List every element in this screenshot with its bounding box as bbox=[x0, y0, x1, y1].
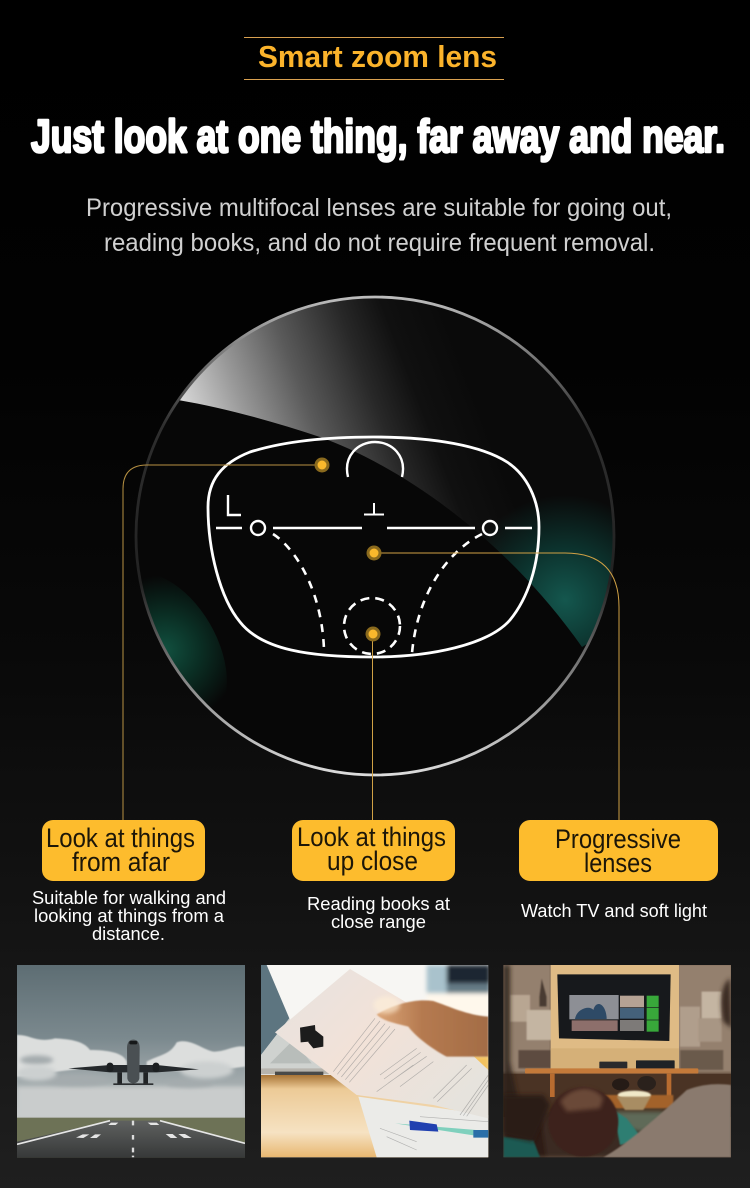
leader line: progressive bbox=[374, 553, 619, 820]
lens diagram bbox=[134, 296, 616, 776]
photo: airplane taking off bbox=[17, 965, 245, 1157]
photos: drawn at 3x coordinates bbox=[17, 965, 732, 1157]
horizontal fitting line bbox=[216, 527, 532, 529]
marker: near bbox=[366, 626, 380, 642]
marker: far bbox=[314, 458, 330, 472]
lens outline bbox=[208, 437, 539, 657]
description: far: Suitable for walking and bbox=[32, 887, 226, 908]
label box: far: Look at things bbox=[46, 823, 195, 853]
description: far bbox=[32, 887, 226, 944]
label box: near: up close bbox=[327, 846, 418, 876]
leader line: near bbox=[372, 634, 374, 820]
distance arc bbox=[347, 442, 403, 477]
lens disc bbox=[134, 296, 616, 776]
label box: progressive bbox=[519, 820, 718, 881]
description: near bbox=[307, 893, 450, 932]
right dashed corridor bbox=[412, 534, 482, 653]
dashed near circle bbox=[344, 598, 400, 654]
right fitting circle bbox=[483, 521, 497, 535]
leader line: far bbox=[123, 465, 322, 820]
left dashed corridor bbox=[273, 534, 324, 650]
label box: far bbox=[42, 820, 205, 881]
label box: near bbox=[292, 820, 455, 881]
fitting cross mark bbox=[364, 503, 384, 514]
label box: near: Look at things bbox=[297, 822, 446, 852]
photo: family watching TV bbox=[503, 965, 732, 1157]
subtitle: reading books, and do not require frequent removal. bbox=[104, 229, 655, 257]
subtitle: Progressive multifocal lenses are suitable for going out, bbox=[86, 194, 672, 222]
photo: hand holding papers bbox=[261, 965, 490, 1157]
subtitle bbox=[86, 194, 672, 257]
label box: progressive: Progressive bbox=[555, 824, 681, 854]
header: Smart zoom lens: Smart zoom lens bbox=[258, 39, 497, 74]
description: near: close range bbox=[331, 911, 426, 932]
label box: progressive: lenses bbox=[584, 848, 652, 878]
letter L mark bbox=[228, 495, 241, 515]
description: far: distance. bbox=[92, 923, 165, 944]
marker: progressive bbox=[366, 546, 382, 560]
description: near: Reading books at bbox=[307, 893, 450, 914]
label box: far: from afar bbox=[72, 847, 170, 877]
description: progressive: Watch TV and soft light bbox=[521, 900, 707, 921]
description: far: looking at things from a bbox=[34, 905, 225, 926]
left fitting circle bbox=[251, 521, 265, 535]
